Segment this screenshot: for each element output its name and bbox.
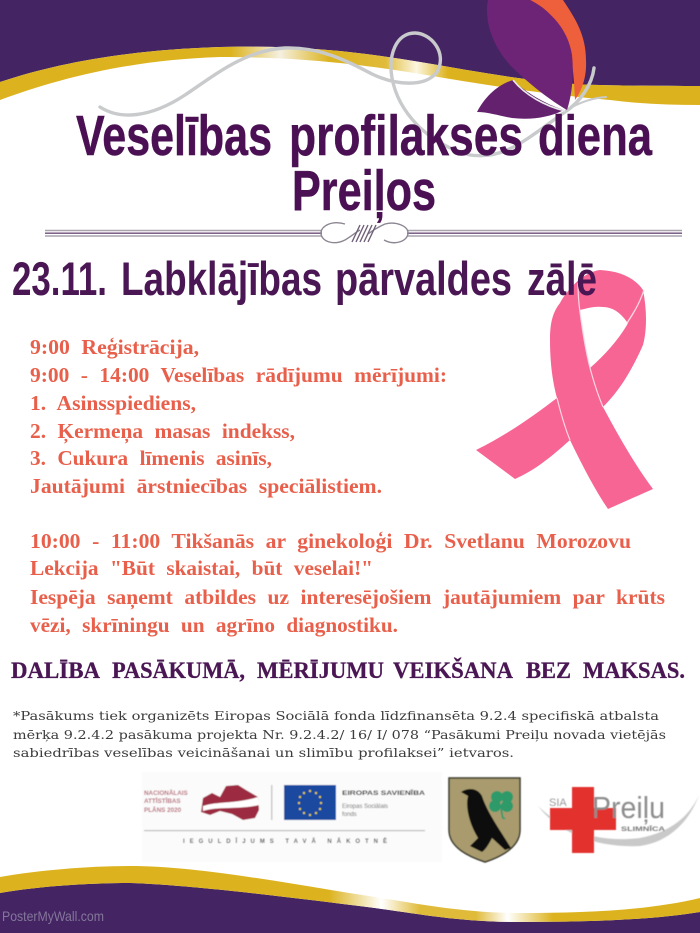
schedule: measurements: 9:00 - 14:00 Veselības rādījumu mērījumi: (30, 363, 447, 387)
title: Veselības (76, 104, 272, 168)
awareness ribbon (476, 270, 653, 509)
schedule: measurements: 2. Ķermeņa masas indekss, (30, 419, 295, 444)
title: profilakses (289, 104, 523, 168)
logo: hospital: Preiļu (592, 790, 665, 825)
logo: EU text: EIROPAS SAVIENĪBA (342, 789, 425, 797)
watermark: PosterMyWall.com (2, 908, 104, 924)
funding footnote (13, 709, 666, 760)
schedule: lecture: Iespēja saņemt atbildes uz interesējošiem jautājumiem par krūts (30, 585, 665, 610)
logo: national development plan: PLĀNS 2020 (144, 806, 182, 814)
title (76, 104, 653, 223)
date and venue heading: 23.11. (12, 252, 107, 305)
schedule: lecture: vēzi, skrīningu un agrīno diagnostiku. (30, 613, 398, 637)
bottom purple wave (0, 866, 700, 933)
title: diena (538, 104, 653, 168)
butterfly (477, 0, 586, 119)
logo: EU text (342, 789, 425, 818)
logo divider (271, 785, 272, 820)
logo: EU text: Eiropas Sociālais (342, 804, 388, 810)
funding footnote: sabiedrības veselības veicināšanai un slimību profilaksei” ietvaros. (13, 746, 514, 760)
logo: national development plan: NACIONĀLAIS (144, 789, 188, 797)
silver swirl ribbon (100, 33, 606, 156)
schedule: lecture (30, 529, 665, 637)
schedule: measurements: 3. Cukura līmenis asinīs, (30, 446, 272, 470)
schedule: measurements (30, 335, 447, 498)
logo: hospital (538, 787, 699, 853)
logo: coat of arms (449, 778, 520, 862)
title: Preiļos (292, 159, 436, 223)
free participation notice: DALĪBA (11, 658, 100, 683)
schedule: measurements: 9:00 Reģistrācija, (30, 335, 199, 359)
date and venue heading: Labklājības (121, 252, 322, 305)
slogan: IEGULDĪJUMS TAVĀ NĀKOTNĒ (183, 838, 387, 845)
date and venue heading (12, 252, 597, 305)
schedule: lecture: Lekcija "Būt skaistai, būt veselai!" (30, 556, 373, 580)
schedule: measurements: Jautājumi ārstniecības speciālistiem. (30, 474, 382, 498)
logo strip (142, 772, 699, 862)
free participation notice: VEIKŠANA (393, 657, 513, 683)
funding footnote: *Pasākums tiek organizēts Eiropas Sociālā fonda līdzfinansēta 9.2.4 specifiskā atbalsta (13, 709, 659, 723)
logo: EU text: fonds (342, 812, 357, 818)
logo: hospital: SLIMNĪCA (621, 825, 665, 833)
date and venue heading: zālē (527, 252, 597, 305)
schedule: measurements: 1. Asinsspiediens, (30, 391, 196, 415)
logo: hospital: SIA (549, 797, 567, 809)
top purple wave (0, 0, 700, 105)
ornamental divider (45, 223, 682, 243)
logo: EU flag (284, 785, 336, 820)
free participation notice: BEZ (526, 658, 571, 683)
logo: national development plan: ATTĪSTĪBAS (144, 797, 181, 805)
free participation notice (11, 657, 685, 683)
schedule: lecture: 10:00 - 11:00 Tikšanās ar ginekoloģi Dr. Svetlanu Morozovu (30, 529, 631, 553)
funding footnote: mērķa 9.2.4.2 pasākuma projekta Nr. 9.2.4.2/ 16/ I/ 078 “Pasākumi Preiļu novada vietējās (13, 728, 666, 742)
logo: national development plan (144, 785, 259, 820)
free participation notice: MAKSAS. (583, 658, 685, 683)
free participation notice: PASĀKUMĀ, (112, 658, 245, 683)
free participation notice: MĒRĪJUMU (257, 658, 384, 683)
date and venue heading: pārvaldes (335, 252, 512, 305)
